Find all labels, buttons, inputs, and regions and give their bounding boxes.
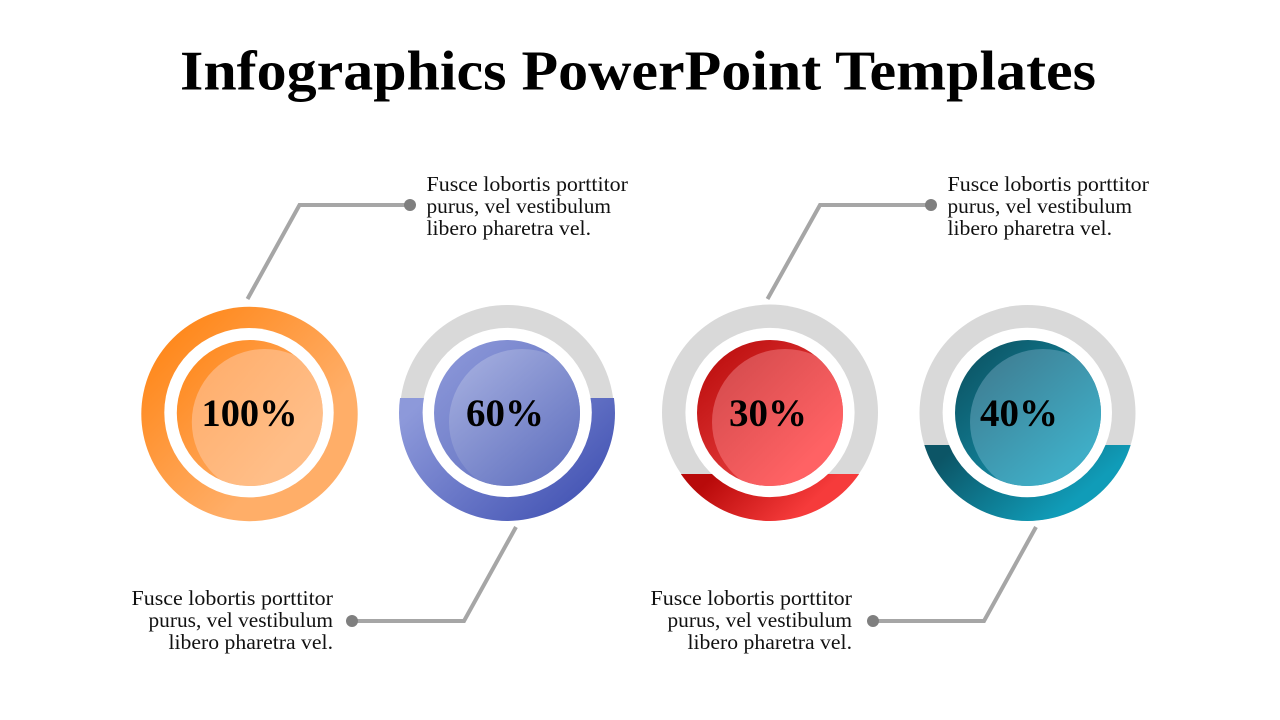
panel: 40% gauge (920, 305, 1136, 521)
teal progress ring (924, 445, 1131, 521)
callout text: 30%: libero pharetra vel. (948, 216, 1112, 240)
blue progress ring (399, 398, 615, 521)
orange progress ring (141, 307, 358, 521)
callout text: 60%: libero pharetra vel. (168, 630, 333, 654)
callout connector: 30% (768, 199, 937, 299)
orange inner disc (176, 340, 323, 486)
callout connector: 40% (867, 527, 1036, 627)
white ring gap (943, 328, 1112, 497)
callout text: 100%: libero pharetra vel. (426, 216, 591, 240)
panel: 30% gauge (662, 304, 878, 521)
callout text: 40% (650, 586, 852, 654)
callout text: 30%: Fusce lobortis porttitor (948, 172, 1149, 196)
callout text: 60% (132, 586, 333, 654)
white ring gap (685, 328, 855, 497)
callout text: 40%: libero pharetra vel. (688, 630, 852, 654)
callout text: 100% (426, 172, 628, 240)
blue inner disc (434, 340, 580, 486)
value 40%: 40% (980, 391, 1058, 435)
grey track (920, 305, 1136, 521)
callout connector: 60% (346, 527, 516, 627)
teal inner disc (955, 340, 1101, 486)
callout text: 100%: purus, vel vestibulum (426, 194, 611, 218)
callout text: 100%: Fusce lobortis porttitor (426, 172, 628, 196)
callout text: 40%: Fusce lobortis porttitor (650, 586, 852, 610)
panel: 100% gauge (141, 307, 358, 521)
grey track (662, 304, 878, 520)
white ring gap (423, 328, 592, 497)
callout text: 60%: Fusce lobortis porttitor (132, 586, 333, 610)
title: Infographics PowerPoint Templates (180, 40, 1096, 102)
value 100%: 100% (202, 391, 298, 435)
callout text: 40%: purus, vel vestibulum (668, 608, 852, 632)
callout text: 60%: purus, vel vestibulum (148, 608, 333, 632)
callout text: 30% (948, 172, 1149, 240)
callout connector: 100% (248, 199, 416, 299)
red progress ring (680, 474, 859, 521)
panel: 60% gauge (399, 305, 615, 521)
value 30%: 30% (729, 391, 807, 435)
value 60%: 60% (466, 391, 544, 435)
callout text: 30%: purus, vel vestibulum (948, 194, 1132, 218)
grey track (400, 305, 614, 519)
red inner disc (697, 340, 843, 486)
white ring gap (164, 328, 334, 497)
